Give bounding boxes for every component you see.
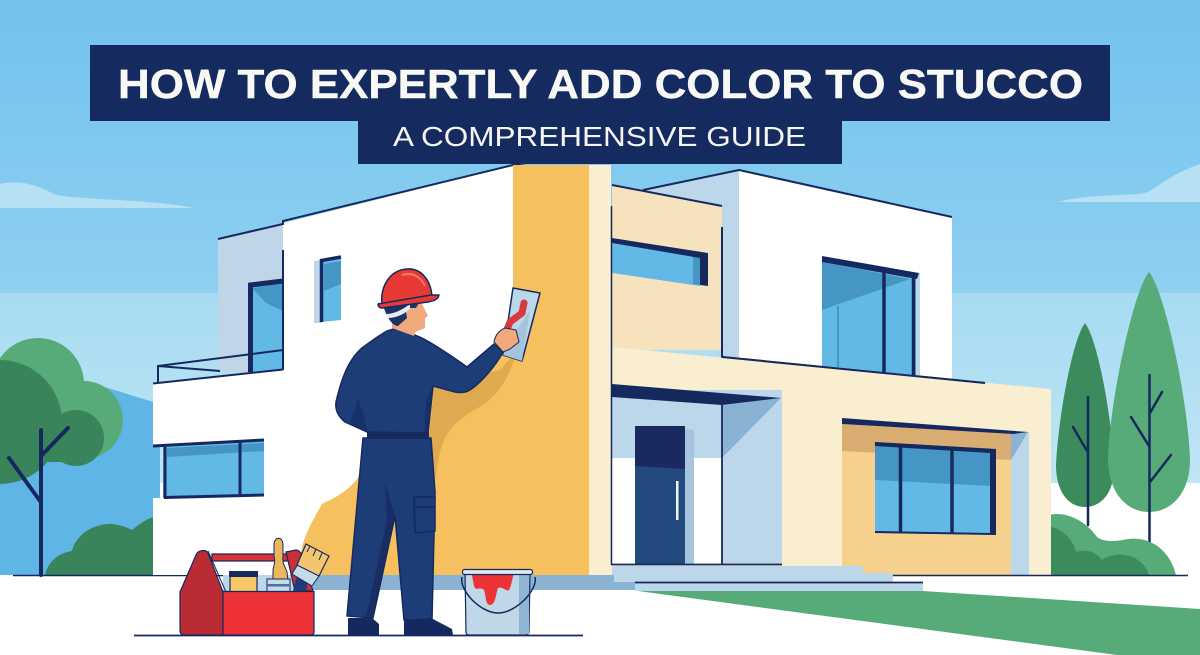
title	[90, 45, 1110, 164]
bucket handle	[462, 577, 535, 613]
blue side wall of upper block	[643, 170, 739, 360]
corner column line	[610, 206, 612, 565]
worker	[336, 269, 540, 635]
distant blue hill	[0, 360, 160, 575]
subtitle banner	[358, 121, 842, 164]
hand	[494, 328, 519, 352]
tan upper block	[612, 185, 722, 350]
balcony railing	[153, 250, 283, 384]
title banner	[90, 45, 1110, 121]
heading text: HOW TO EXPERTLY ADD COLOR TO STUCCO	[118, 61, 1083, 107]
upper block base line	[722, 357, 985, 383]
flat brush	[267, 538, 290, 592]
cream lower volume	[611, 347, 1051, 575]
right alcove	[842, 418, 1029, 575]
right tree: dark	[1056, 323, 1114, 525]
red paint drips	[471, 570, 515, 605]
right tree: light	[1108, 272, 1190, 545]
rear tray	[223, 575, 312, 592]
cream corner column	[589, 165, 611, 575]
bucket rim	[462, 570, 532, 574]
angled brush	[292, 544, 329, 591]
toolbox handle	[212, 554, 288, 561]
upper roof lines	[612, 170, 985, 383]
lawn	[638, 591, 1200, 655]
toolbox diagonal edge	[208, 551, 226, 592]
ground line: left	[13, 574, 300, 576]
yellow stucco column	[300, 165, 589, 575]
leg inner shadow	[366, 483, 395, 617]
arm shadow on wall	[425, 352, 516, 480]
belt	[367, 432, 429, 439]
base shadow strip	[313, 575, 635, 590]
main white wall	[153, 165, 515, 575]
paint jar	[229, 571, 258, 592]
paint bucket	[462, 570, 535, 635]
cloud: right	[1059, 164, 1200, 202]
bucket shade	[519, 574, 529, 634]
small window	[314, 257, 341, 323]
left wing and main roof line	[218, 163, 526, 239]
torso shading	[350, 386, 433, 433]
subheading text: A COMPREHENSIVE GUIDE	[393, 121, 806, 152]
house	[153, 163, 1051, 591]
rear end cap	[286, 550, 313, 591]
slot window	[612, 238, 708, 286]
left wing wall	[218, 225, 283, 372]
ground line: right	[893, 574, 1188, 576]
alcove window	[875, 442, 996, 535]
door	[635, 426, 694, 565]
trowel	[503, 288, 540, 361]
head	[378, 269, 439, 336]
toolbox side	[180, 551, 223, 635]
cloud: left	[0, 182, 194, 208]
right bush	[1050, 514, 1176, 575]
toolbox front	[223, 592, 314, 635]
boots	[348, 618, 453, 635]
hard hat	[378, 269, 439, 308]
upper left window	[250, 281, 283, 372]
lower left window	[153, 440, 264, 498]
left bush	[45, 517, 154, 575]
left tree	[0, 338, 123, 575]
foreground ground line	[134, 634, 583, 636]
white upper block	[739, 170, 952, 384]
cargo pocket	[414, 497, 435, 533]
bucket body	[465, 572, 530, 635]
front steps	[612, 566, 923, 591]
torso and arm	[336, 328, 503, 433]
entrance porch	[611, 384, 782, 565]
toolbox	[180, 538, 329, 635]
large upper window	[822, 256, 920, 376]
legs	[347, 438, 435, 620]
